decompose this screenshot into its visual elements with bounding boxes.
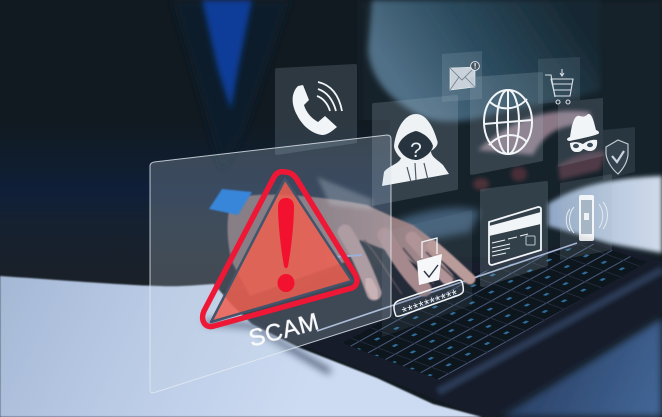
rear hand <box>473 111 606 190</box>
password field: ********** <box>400 286 461 320</box>
panel: password lock <box>382 210 472 337</box>
reflected light line <box>317 243 577 331</box>
desk edge shadow <box>205 322 330 372</box>
icon: alert triangle outline <box>203 172 357 327</box>
panel: globe <box>470 72 543 175</box>
glass reflection line <box>333 255 362 257</box>
alert triangle fill <box>211 179 352 322</box>
hand: finger one tip <box>368 282 375 295</box>
blue tie <box>202 0 252 110</box>
icon: telephone handset <box>293 82 342 135</box>
right desk patch <box>548 176 662 253</box>
icon: padlock with check <box>417 238 442 285</box>
hand: finger shadows <box>364 240 456 294</box>
suit lapels <box>172 0 290 170</box>
sleeve in upper right <box>368 0 600 122</box>
icon: mail with alert <box>450 62 479 90</box>
icon: shield with check <box>606 140 628 174</box>
icon: exclamation mark <box>278 198 294 292</box>
panel: envelope <box>442 51 482 102</box>
panel: main alert glass <box>150 135 391 393</box>
desk <box>0 276 482 417</box>
icon: wireframe globe <box>484 90 532 154</box>
panel: shopping cart <box>538 57 580 104</box>
laptop corner table <box>500 318 662 417</box>
label: SCAM: SCAM <box>246 308 322 353</box>
question mark: ? <box>410 139 422 162</box>
hand: finger one <box>345 232 374 293</box>
icon: hat and mask <box>567 114 599 152</box>
background right side <box>360 0 662 260</box>
blue cuff <box>209 189 252 215</box>
panel: phone call <box>275 64 357 155</box>
hand: finger four <box>432 245 470 279</box>
icon: vibrating phone <box>566 195 608 241</box>
panel: mobile phone <box>560 174 612 260</box>
blue haze behind hand <box>395 208 480 246</box>
hand: back and wrist <box>228 195 447 296</box>
hand: finger three <box>412 238 447 278</box>
panel: hacker <box>372 95 458 206</box>
icon: cart <box>545 69 573 104</box>
panel: spy <box>558 98 603 167</box>
laptop body <box>240 240 662 417</box>
panel: credit card <box>480 181 548 287</box>
glass reflection patch <box>317 177 372 210</box>
laptop front edge <box>438 270 662 392</box>
hand: finger two <box>385 235 424 289</box>
panel: shield <box>603 127 635 180</box>
background left band <box>0 120 390 290</box>
keyboard <box>342 243 647 380</box>
icon: credit card <box>489 207 541 265</box>
